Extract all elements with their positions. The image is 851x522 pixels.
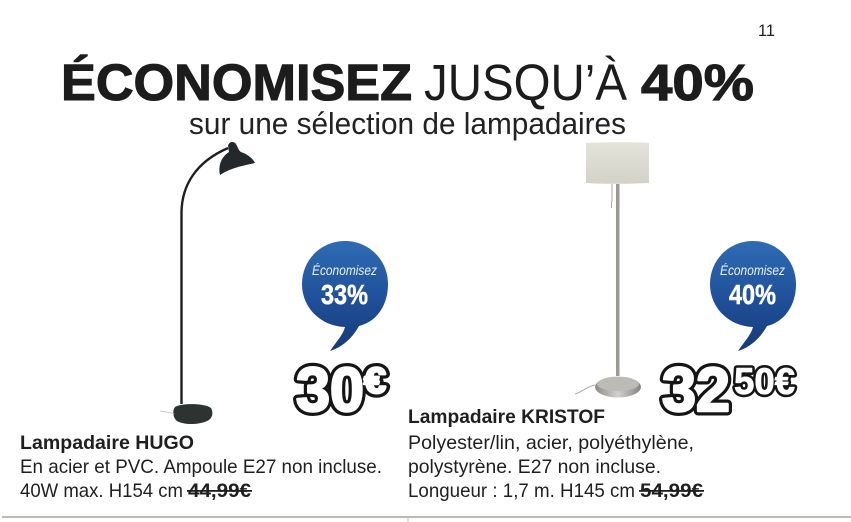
- product text: Hugo: En acier et PVC. Ampoule E27 non incluse.: [20, 456, 382, 478]
- bubble: save 40%: 40%: [729, 279, 776, 310]
- bubble: save 33%: Économisez: [312, 262, 377, 278]
- price: 32,50 euros: [662, 356, 795, 425]
- product text: Hugo: 40W max. H154 cm: [20, 480, 183, 502]
- product text: Hugo: [20, 432, 382, 502]
- title: JUSQU’À: [424, 54, 627, 111]
- title: [61, 54, 754, 111]
- product text: Kristof: 54,99€: [640, 480, 703, 502]
- price: 32,50 euros: 32: [662, 356, 730, 425]
- product text: Kristof: Longueur : 1,7 m. H145 cm: [408, 480, 635, 502]
- product text: Kristof: Lampadaire KRISTOF: [408, 406, 605, 428]
- bubble: save 40%: Économisez: [720, 262, 785, 278]
- title: ÉCONOMISEZ: [61, 54, 412, 111]
- subtitle: sur une sélection de lampadaires: [189, 106, 626, 141]
- price: 30 euros: €: [364, 360, 386, 401]
- price: 32,50 euros: 50€: [734, 361, 795, 402]
- lamp: Kristof: [575, 142, 649, 398]
- price: 32,50 euros: 32: [662, 356, 730, 425]
- price: 30 euros: 30: [296, 356, 364, 425]
- bubble: save 33%: 33%: [321, 279, 368, 310]
- price: 32,50 euros: 50€: [734, 361, 795, 402]
- product text: Hugo: 44,99€: [188, 480, 251, 502]
- title: 40%: [641, 54, 754, 111]
- page number: 11: [758, 21, 775, 40]
- bubble: save 33%: [302, 241, 388, 351]
- product text: Hugo: Lampadaire HUGO: [20, 432, 194, 454]
- product text: Kristof: polystyrène. E27 non incluse.: [408, 456, 661, 478]
- product text: Kristof: Polyester/lin, acier, polyéthylène,: [408, 432, 694, 454]
- price: 30 euros: €: [364, 360, 386, 401]
- price: 30 euros: 30: [296, 356, 364, 425]
- lamp: Hugo: [160, 142, 255, 424]
- bubble: save 40%: [710, 241, 796, 351]
- product text: Kristof: [408, 406, 704, 502]
